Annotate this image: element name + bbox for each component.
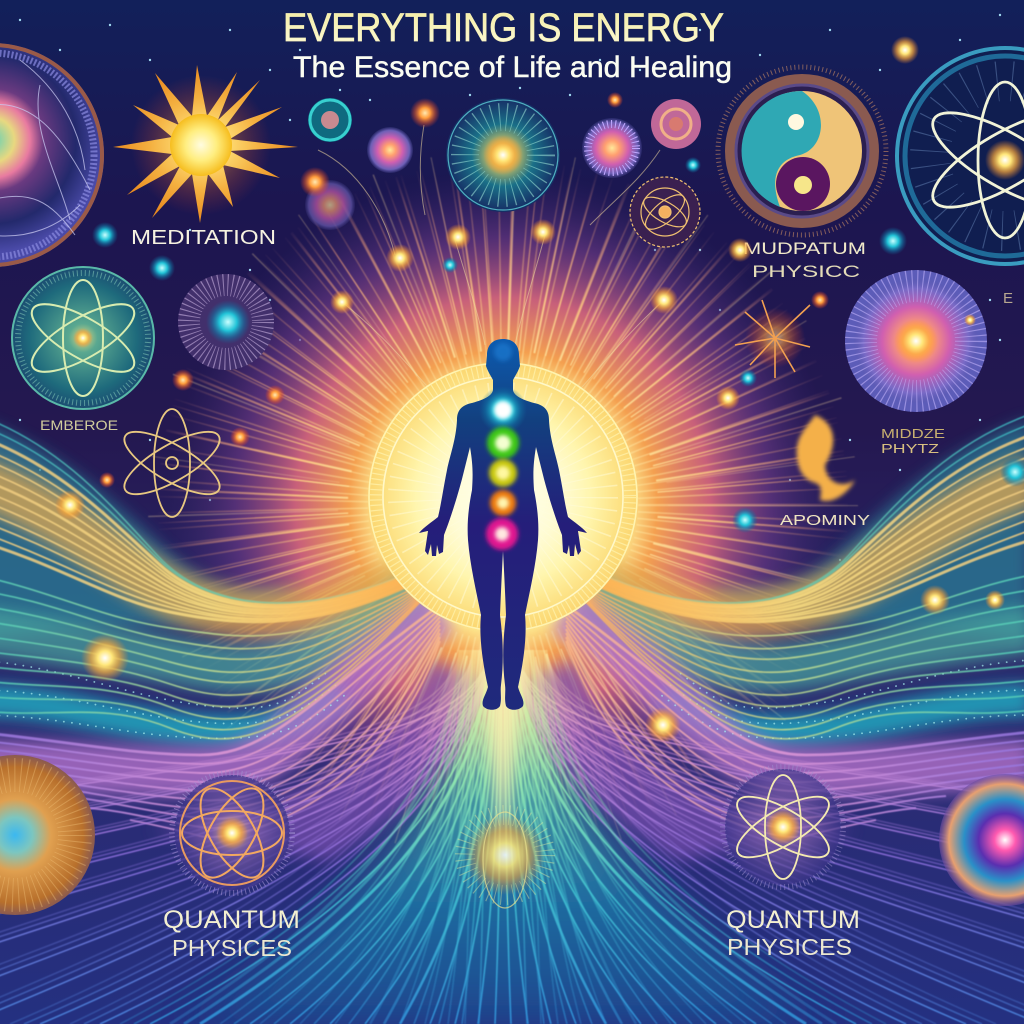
- right label: distorted physics: PHYTZ: [881, 441, 939, 456]
- left energy waves and lower fan: [0, 414, 502, 1024]
- flame figure: [797, 415, 855, 501]
- firework burst: [735, 300, 810, 378]
- pink ring orb: [651, 99, 701, 149]
- right label: quantum physics: [726, 906, 860, 960]
- subtitle: The Essence of Life and Healing: [293, 51, 732, 84]
- right top atom sphere: [895, 46, 1024, 266]
- left label: quantum physics: [163, 906, 300, 961]
- radiating energy rays: [243, 245, 763, 765]
- left label: quantum physics: QUANTUM: [163, 906, 300, 934]
- central radiant glow: [168, 170, 838, 840]
- bottom centre glow mandala: [465, 812, 545, 908]
- bottom left sphere: [0, 755, 95, 915]
- left label: quantum physics: PHYSICES: [172, 935, 292, 961]
- yin yang symbol: [718, 67, 886, 235]
- glowing energy particles: [55, 36, 1024, 743]
- right label: quantum physics: QUANTUM: [726, 906, 860, 934]
- left label: embrace: EMBEROE: [40, 417, 118, 433]
- right label: distorted physics: MIDDZE: [881, 426, 945, 441]
- bottom-centre light beam: [480, 640, 526, 860]
- curved energy tendrils: [318, 125, 664, 400]
- right label: distorted physics: [881, 426, 945, 456]
- right label: quantum physics: PHYSICC: [752, 262, 860, 281]
- chakra points: [479, 386, 527, 550]
- lower energy bell: [190, 700, 816, 1024]
- teal ring orb: [308, 98, 352, 142]
- bottom left atom: [172, 773, 292, 893]
- label: apomenty: APOMINY: [780, 512, 870, 529]
- bottom right atom: [723, 767, 843, 887]
- large violet sphere: [845, 270, 987, 412]
- left green atom sphere: [11, 266, 155, 410]
- label: meditation: MEDITATION: [131, 227, 276, 249]
- golden mandala: [630, 177, 700, 247]
- title: EVERYTHING IS ENERGY: [283, 6, 724, 50]
- left top cosmic sphere: [0, 43, 104, 267]
- background star particles: [20, 15, 1000, 560]
- far-right faint label: E: [1003, 290, 1013, 307]
- right label: quantum physics: [743, 239, 866, 281]
- small outline atom: [116, 409, 228, 517]
- bottom right ring sphere: [939, 774, 1024, 906]
- top centre teal sphere: [446, 98, 560, 212]
- right label: quantum physics: PHYSICES: [727, 934, 852, 960]
- right label: quantum physics: MUDPATUM: [743, 239, 866, 258]
- purple sparkle orbs: [305, 118, 642, 230]
- halo around figure: [368, 362, 638, 632]
- right energy waves and lower fan: [504, 414, 1024, 1024]
- human figure silhouette: [419, 339, 587, 710]
- lilac sphere: [178, 274, 274, 370]
- sun: [113, 65, 298, 223]
